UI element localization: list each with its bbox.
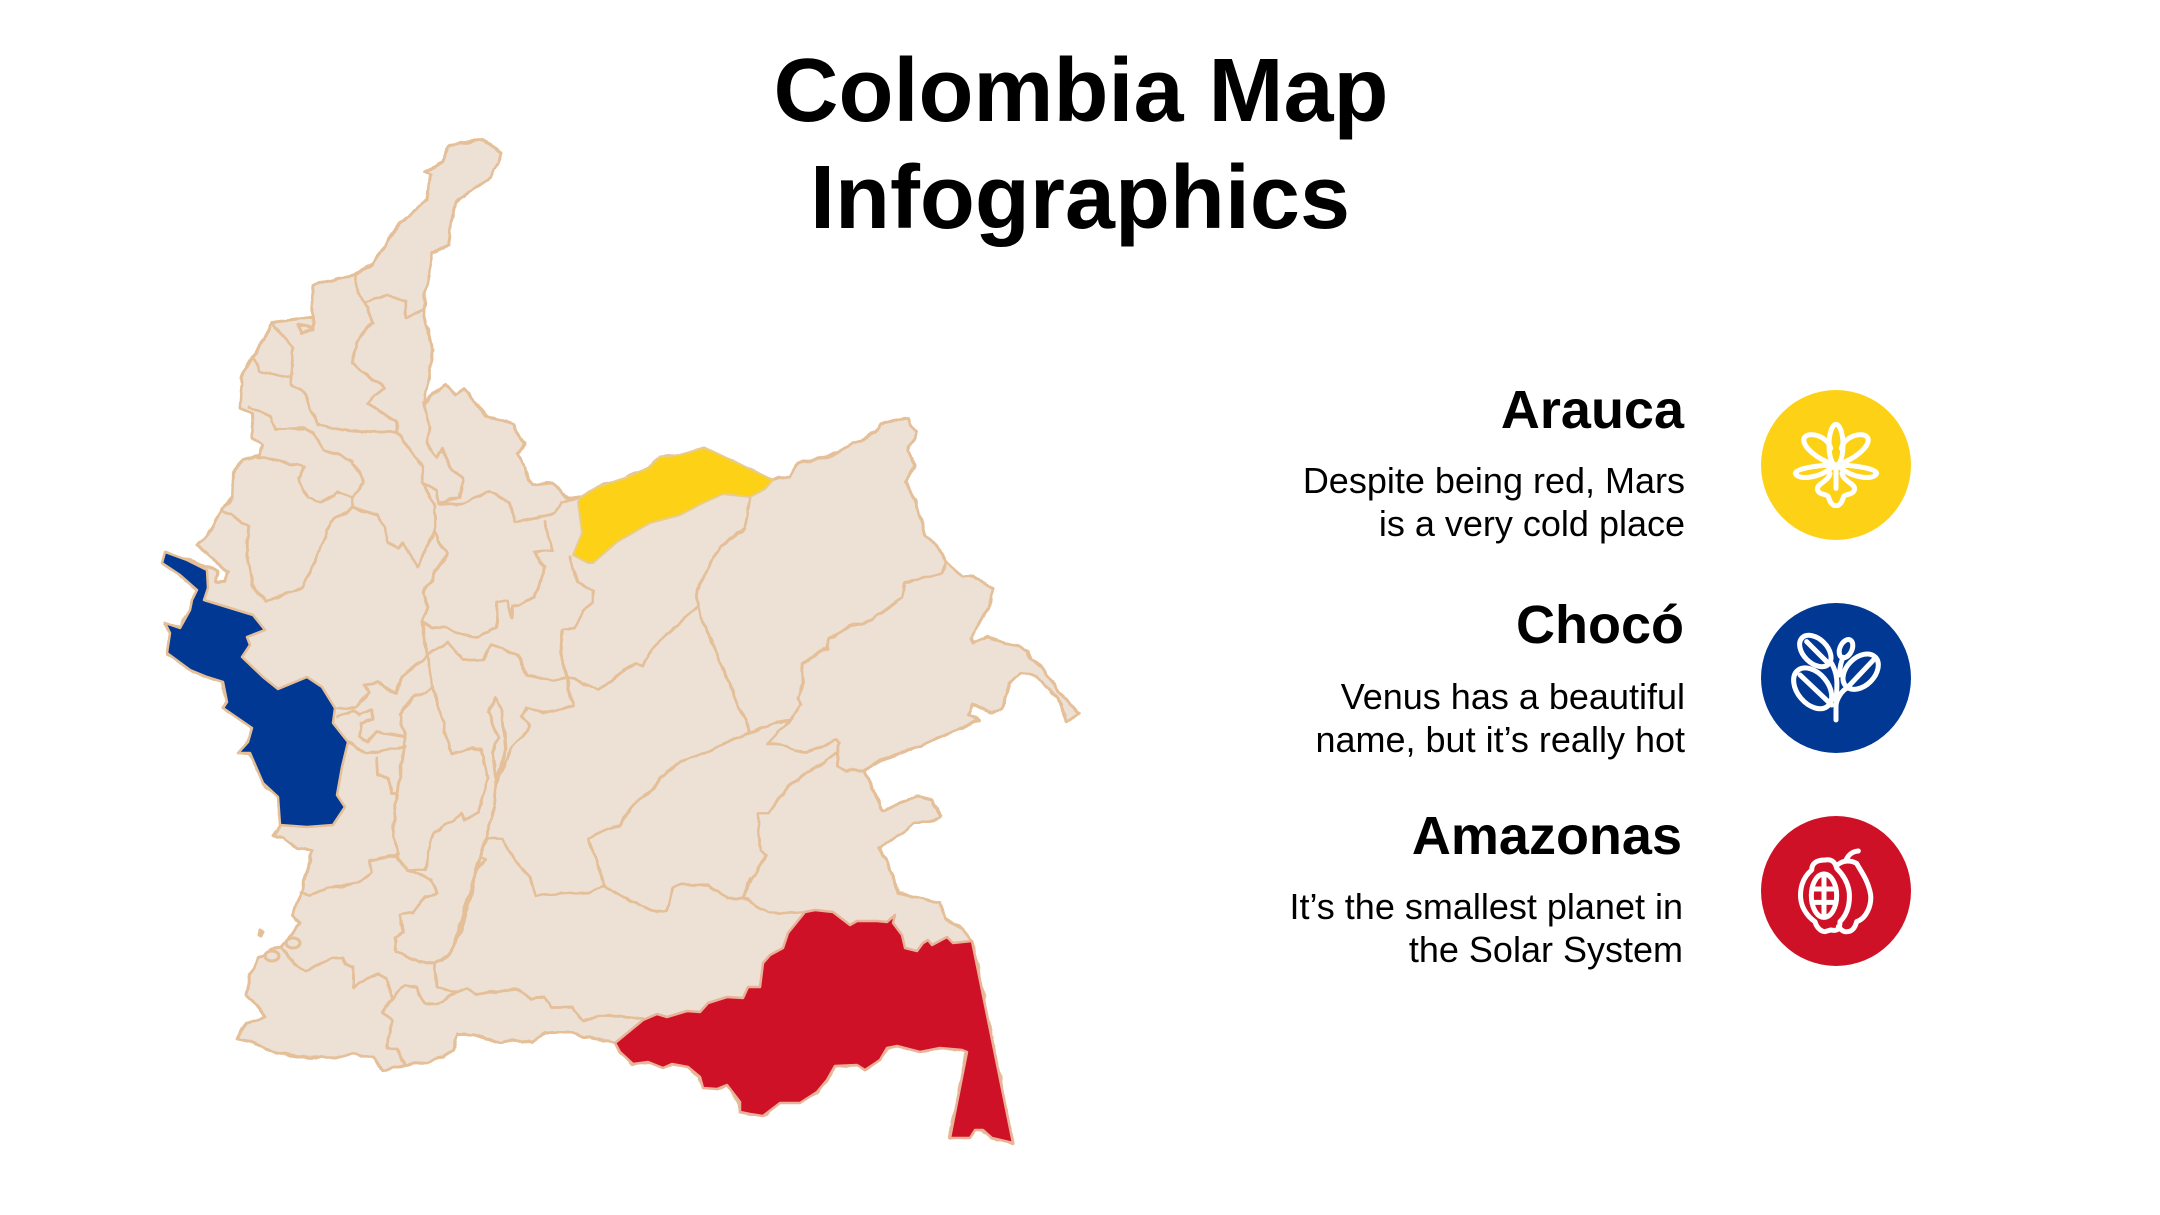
title: Colombia Map (773, 41, 1389, 141)
item: Arauca (1303, 380, 1911, 544)
title (773, 41, 1389, 248)
description: Amazonas: the Solar System (1409, 929, 1683, 970)
internal department borders (223, 275, 947, 1065)
land base (162, 140, 1080, 1143)
item: Chocó (1315, 595, 1911, 760)
description: Arauca: is a very cold place (1379, 503, 1685, 544)
icon: cacao fruit on red circle (1761, 816, 1911, 966)
description: Amazonas: It’s the smallest planet in (1289, 886, 1683, 927)
title: Infographics (810, 148, 1350, 248)
region: Chocó (blue) (162, 552, 348, 827)
icon: flower on yellow circle (1761, 390, 1911, 540)
heading: Amazonas: Amazonas (1412, 806, 1682, 866)
heading: Arauca: Arauca (1501, 380, 1685, 440)
map of Colombia (162, 140, 1080, 1143)
icon: leaves on blue circle (1761, 603, 1911, 753)
heading: Chocó: Chocó (1516, 595, 1684, 655)
description: Arauca: Despite being red, Mars (1303, 460, 1685, 501)
description: Chocó: name, but it’s really hot (1315, 719, 1685, 760)
description: Chocó: Venus has a beautiful (1341, 676, 1685, 717)
region: Arauca (yellow) (573, 448, 773, 563)
item: Amazonas (1289, 806, 1911, 970)
region: Amazonas (red) (615, 910, 1013, 1143)
coastal lagoons and island (259, 930, 300, 961)
